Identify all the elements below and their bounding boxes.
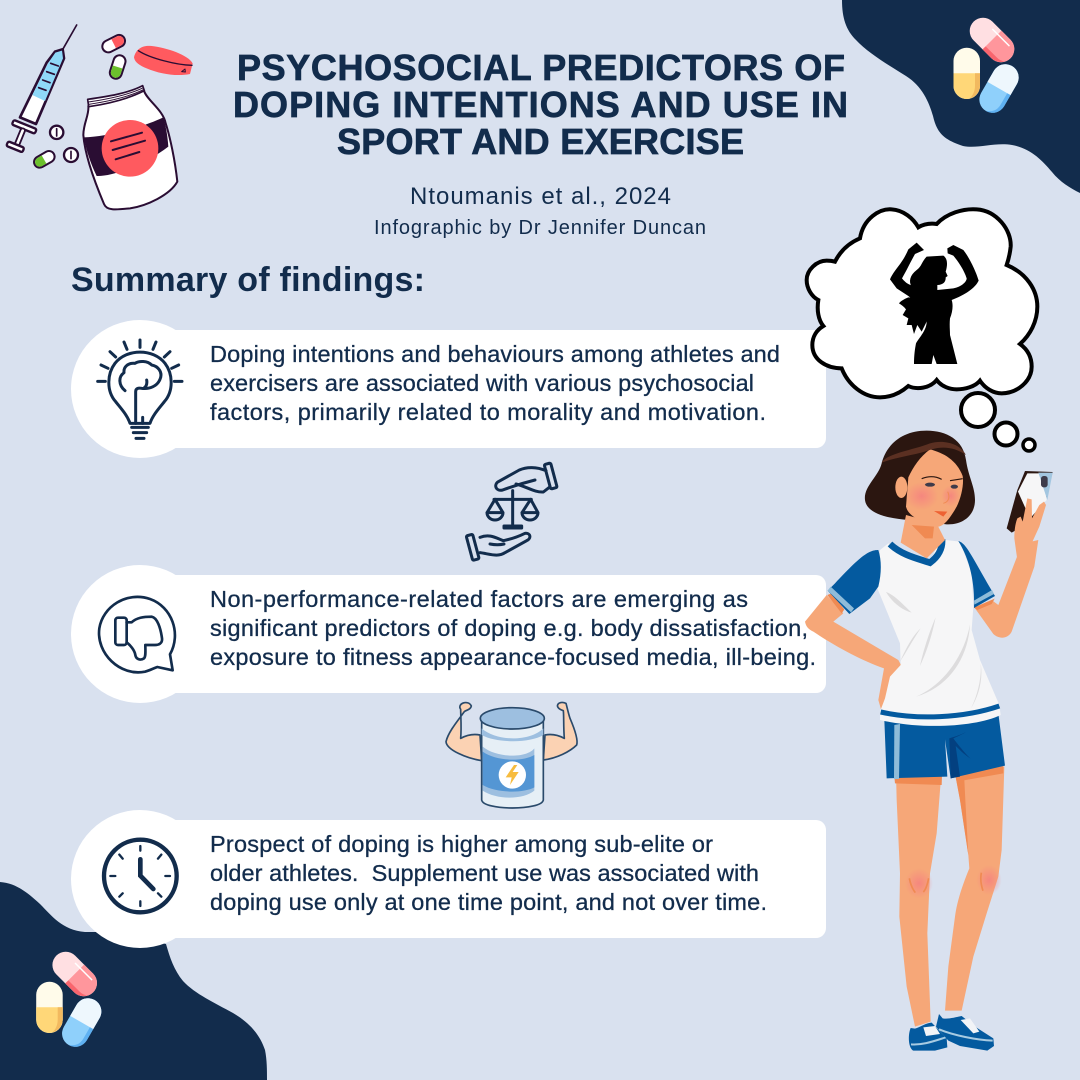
sleeves	[828, 550, 881, 614]
panel: finding 1	[71, 320, 826, 458]
hem stripe	[881, 706, 999, 717]
icon: light bulb with brain	[98, 340, 182, 438]
text: finding 3: doping use only at one time point, and not over time.	[210, 889, 767, 915]
author credit: Infographic by Dr Jennifer Duncan	[374, 217, 706, 239]
nose and lips	[943, 492, 949, 503]
text: finding 3: older athletes. Supplement use was associated with	[210, 860, 759, 886]
shorts, shirt and arms	[805, 539, 1038, 785]
icon: supplement tub with flexing arms	[446, 702, 577, 808]
legs and shoes	[896, 767, 1004, 1051]
text: finding 1: Doping intentions and behaviours among athletes and	[210, 341, 780, 367]
left arm	[805, 595, 901, 712]
icon: round tablet	[64, 148, 78, 162]
heading: summary of findings: Summary of findings:	[71, 261, 425, 299]
icon: jar	[83, 86, 177, 209]
capsules: top right	[954, 12, 1024, 118]
thought dot medium	[994, 422, 1018, 446]
collar	[890, 539, 942, 563]
text: finding 1: exercisers are associated with various psychosocial	[210, 370, 754, 396]
thought bubble	[807, 209, 1037, 451]
right arm	[974, 540, 1038, 638]
icon: round tablet	[50, 126, 63, 139]
eyes and brows	[922, 477, 963, 481]
text: finding 3: Prospect of doping is higher among sub-elite or	[210, 831, 713, 857]
neck	[901, 515, 945, 558]
blush	[905, 482, 938, 510]
decorative blob: bottom left	[0, 882, 267, 1080]
text: finding 2	[210, 586, 816, 670]
cloud outline	[807, 209, 1037, 397]
hand	[1014, 498, 1046, 560]
panel: finding 3	[71, 810, 826, 948]
illustration: syringe, pills and supplement jar	[6, 25, 193, 209]
text: finding 2: significant predictors of doping e.g. body dissatisfaction,	[210, 615, 808, 641]
panel: finding 2	[71, 565, 826, 703]
head, hair and phone	[865, 431, 1053, 560]
citation: Ntoumanis et al., 2024	[410, 183, 671, 210]
icon: clock	[104, 840, 177, 912]
title	[233, 47, 848, 162]
thought dot small	[1023, 439, 1035, 451]
icon: pill pink	[100, 33, 127, 54]
illustration: woman with phone	[805, 431, 1053, 1051]
shorts	[894, 766, 1003, 785]
silhouette: flexing athlete	[890, 243, 979, 364]
icon: thumbs down speech bubble	[99, 597, 175, 672]
icon: pill green lower	[32, 149, 57, 170]
hair highlight	[882, 442, 966, 463]
capsules: bottom left	[36, 946, 106, 1052]
ear	[895, 477, 907, 498]
phone	[1007, 471, 1053, 533]
title: SPORT AND EXERCISE	[337, 121, 744, 162]
text: finding 2: Non-performance-related factors are emerging as	[210, 586, 748, 612]
text: finding 3	[210, 831, 767, 915]
text: finding 1	[210, 341, 780, 425]
face	[906, 449, 963, 527]
thought dot large	[961, 393, 995, 427]
icon: pill green upper	[108, 54, 127, 80]
title: DOPING INTENTIONS AND USE IN	[233, 84, 848, 125]
title: PSYCHOSOCIAL PREDICTORS OF	[237, 47, 845, 88]
icon: hands with scales of justice	[466, 463, 557, 560]
shirt	[877, 539, 1001, 726]
decorative blob: top right	[842, 0, 1080, 193]
icon: syringe	[6, 25, 77, 152]
text: finding 2: exposure to fitness appearance-focused media, ill-being.	[210, 644, 816, 670]
icon: red lid	[134, 46, 193, 75]
hair	[865, 431, 975, 524]
text: finding 1: factors, primarily related to morality and motivation.	[210, 399, 766, 425]
